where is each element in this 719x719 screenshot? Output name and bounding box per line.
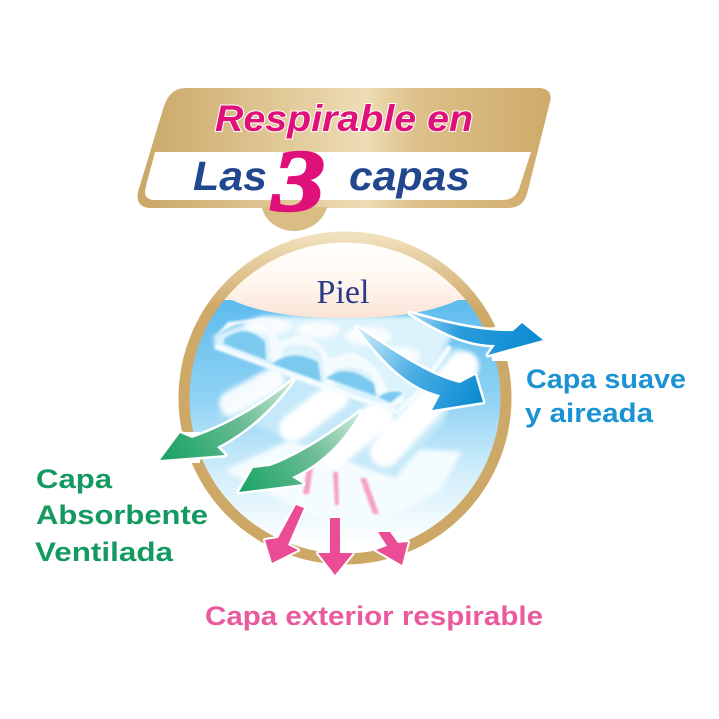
badge white panel [145,152,531,200]
label: capa absorbente: Capa [36,464,113,494]
circle diagram [160,237,543,575]
arrow: blue lower [357,327,483,410]
badge gold frame [138,88,551,231]
arrow: green right [239,412,360,492]
ring gap right [488,322,522,361]
title badge [138,88,551,231]
skin band [221,240,469,318]
heading: 3: 3 [271,133,325,230]
arrow: pink centre [318,518,353,575]
label: capa absorbente: Absorbente [36,500,208,530]
pink air streams [303,467,379,514]
label: capa absorbente: Ventilada [35,537,174,567]
label: capa exterior: Capa exterior respirable [205,601,543,631]
arch openings [224,331,403,403]
top sheet fluff [213,316,452,410]
blue background [188,241,502,555]
heading: Respirable en: Respirable en [215,98,473,139]
badge tab [262,207,327,231]
middle layer base [218,348,462,478]
absorbent channels [231,366,464,452]
fringe highlights [215,346,450,412]
ring gap left [172,432,200,463]
label: Piel: Piel [317,274,369,311]
label: capa absorbente [35,464,208,567]
diaper layers illustration [213,316,464,535]
infographic [35,88,685,630]
label: capa suave [525,364,686,428]
top sheet arches [214,318,404,408]
arrow: green left [160,380,293,460]
fluff highlights [244,318,420,365]
arrow: pink left [265,505,304,563]
label: capa suave: Capa suave [526,364,686,394]
heading: capas: capas [349,153,470,199]
arrow: blue upper [410,313,543,355]
label: capa suave: y aireada [525,398,654,428]
bottom sheet [226,440,462,516]
gold ring [184,237,506,559]
arrow: pink right [376,532,408,565]
heading: Las: Las [193,153,267,199]
